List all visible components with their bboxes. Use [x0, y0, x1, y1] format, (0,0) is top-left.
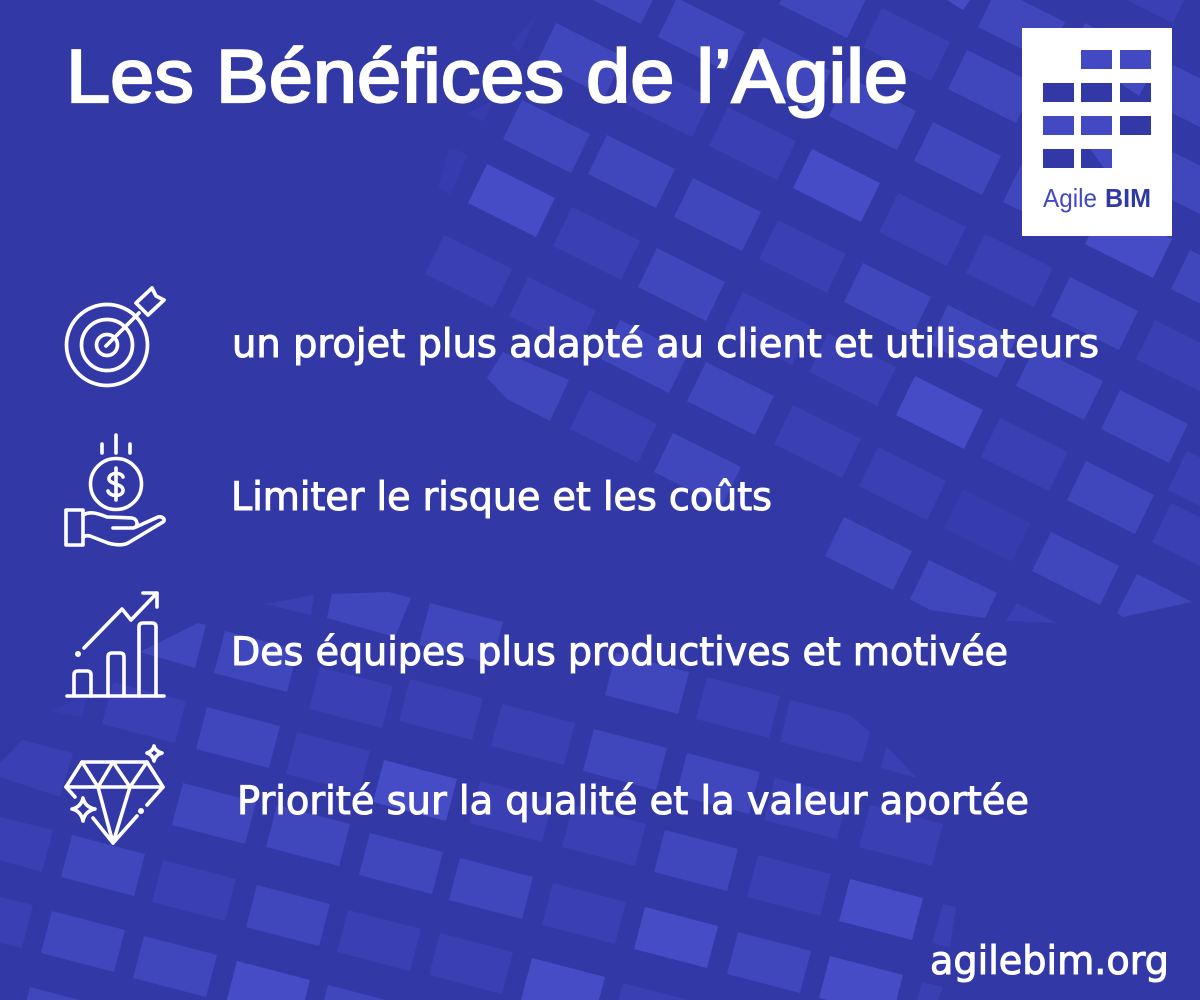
logo wordmark: Agile	[1043, 183, 1097, 213]
logo: Agile BIM	[1022, 28, 1172, 236]
icon: rising bar chart	[67, 593, 164, 696]
icon: target with arrow	[66, 288, 164, 386]
logo brick grid	[1043, 50, 1151, 168]
website url: agilebim.org	[930, 939, 1169, 984]
benefit text 2: Limiter le risque et les coûts	[231, 475, 772, 520]
icon: coin over open hand	[66, 435, 164, 545]
benefit text 1: un projet plus adapté au client et utilisateurs	[232, 322, 1099, 367]
title: Les Bénéfices de l’Agile	[66, 34, 908, 118]
logo wordmark: BIM	[1105, 183, 1151, 213]
icon: diamond with sparkles	[66, 746, 163, 843]
benefit text 4: Priorité sur la qualité et la valeur aportée	[237, 779, 1029, 824]
benefit text 3: Des équipes plus productives et motivée	[231, 630, 1008, 675]
